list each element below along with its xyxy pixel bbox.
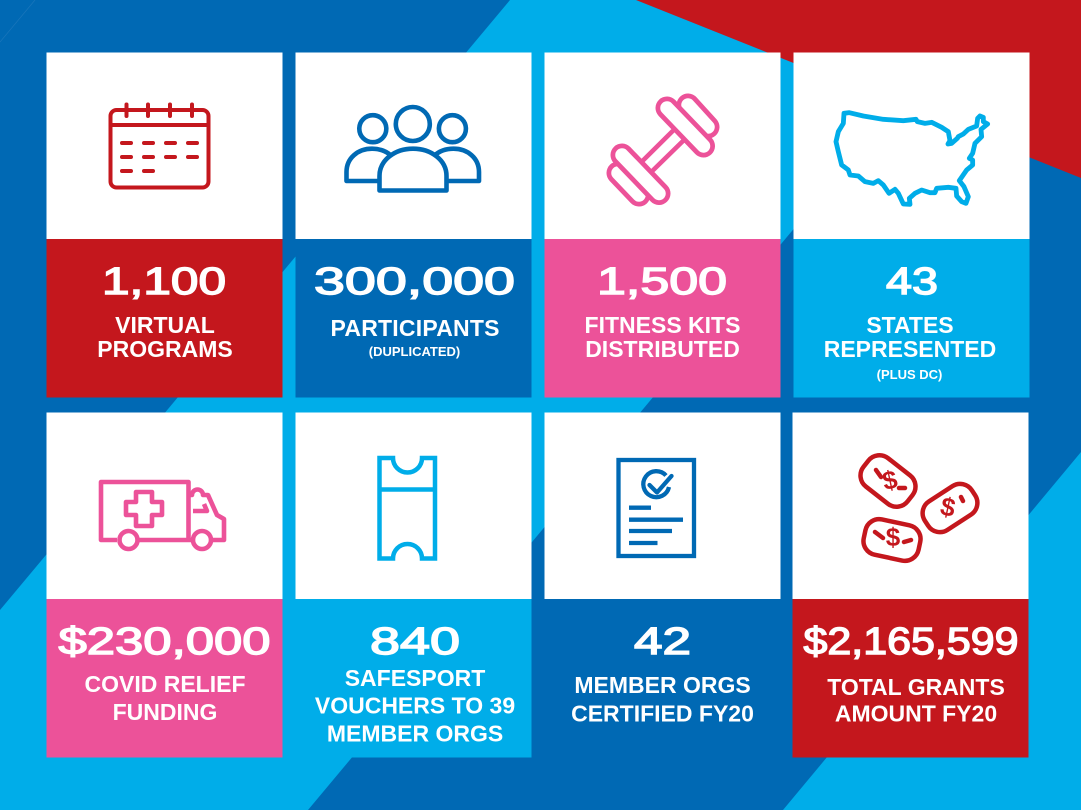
panel: member orgs certified [544, 412, 780, 758]
stat: 43: 43 [886, 261, 938, 303]
icon: coins: $ [886, 522, 901, 552]
label: safesport vouchers: SAFESPORT [345, 665, 485, 691]
icon: coins [855, 450, 983, 563]
panel: participants [296, 52, 532, 398]
icon: ambulance [101, 482, 224, 549]
label: fitness kits distributed: FITNESS KITS [585, 312, 740, 338]
icon: ticket [380, 458, 435, 558]
note: plus DC: (PLUS DC) [877, 367, 942, 382]
stat: 1,500: 1,500 [597, 261, 727, 303]
stat: $230,000: $230,000 [58, 621, 270, 663]
label: participants: PARTICIPANTS [330, 315, 500, 341]
note: duplicated: (DUPLICATED) [369, 344, 460, 359]
panel: virtual programs [46, 52, 282, 398]
label: virtual programs: PROGRAMS [97, 336, 233, 362]
label: fitness kits distributed: DISTRIBUTED [585, 336, 740, 362]
icon: group of people [346, 107, 479, 190]
icon: dumbbell [618, 105, 708, 195]
panel: total grants amount [792, 412, 1028, 758]
panel: states represented [794, 52, 1030, 398]
icon: coins: $ [880, 464, 901, 496]
stat: $2,165,599: $2,165,599 [804, 621, 1018, 663]
label: member orgs certified: CERTIFIED FY20 [571, 700, 754, 726]
panel: covid relief funding [46, 412, 282, 758]
panel: safesport vouchers [296, 412, 532, 758]
label: states represented: REPRESENTED [824, 336, 996, 362]
label: covid relief funding: COVID RELIEF [84, 671, 246, 697]
stat: 300,000: 300,000 [314, 261, 515, 303]
label: member orgs certified: MEMBER ORGS [574, 672, 751, 698]
stat: 1,100: 1,100 [102, 261, 226, 303]
stat: 840: 840 [370, 621, 460, 663]
label: total grants amount: TOTAL GRANTS [827, 674, 1005, 700]
icon: coins: $ [938, 491, 959, 523]
label: states represented: STATES [866, 312, 954, 338]
label: safesport vouchers: MEMBER ORGS [327, 720, 503, 746]
label: virtual programs: VIRTUAL [115, 312, 215, 338]
panel: fitness kits [544, 52, 780, 398]
label: covid relief funding: FUNDING [113, 699, 217, 725]
label: total grants amount: AMOUNT FY20 [835, 700, 997, 726]
icon: map of the USA [836, 113, 988, 204]
icon: certified document [618, 460, 694, 556]
label: safesport vouchers: VOUCHERS TO 39 [315, 692, 515, 718]
stat: 42: 42 [634, 621, 691, 663]
icon: calendar [110, 104, 208, 188]
